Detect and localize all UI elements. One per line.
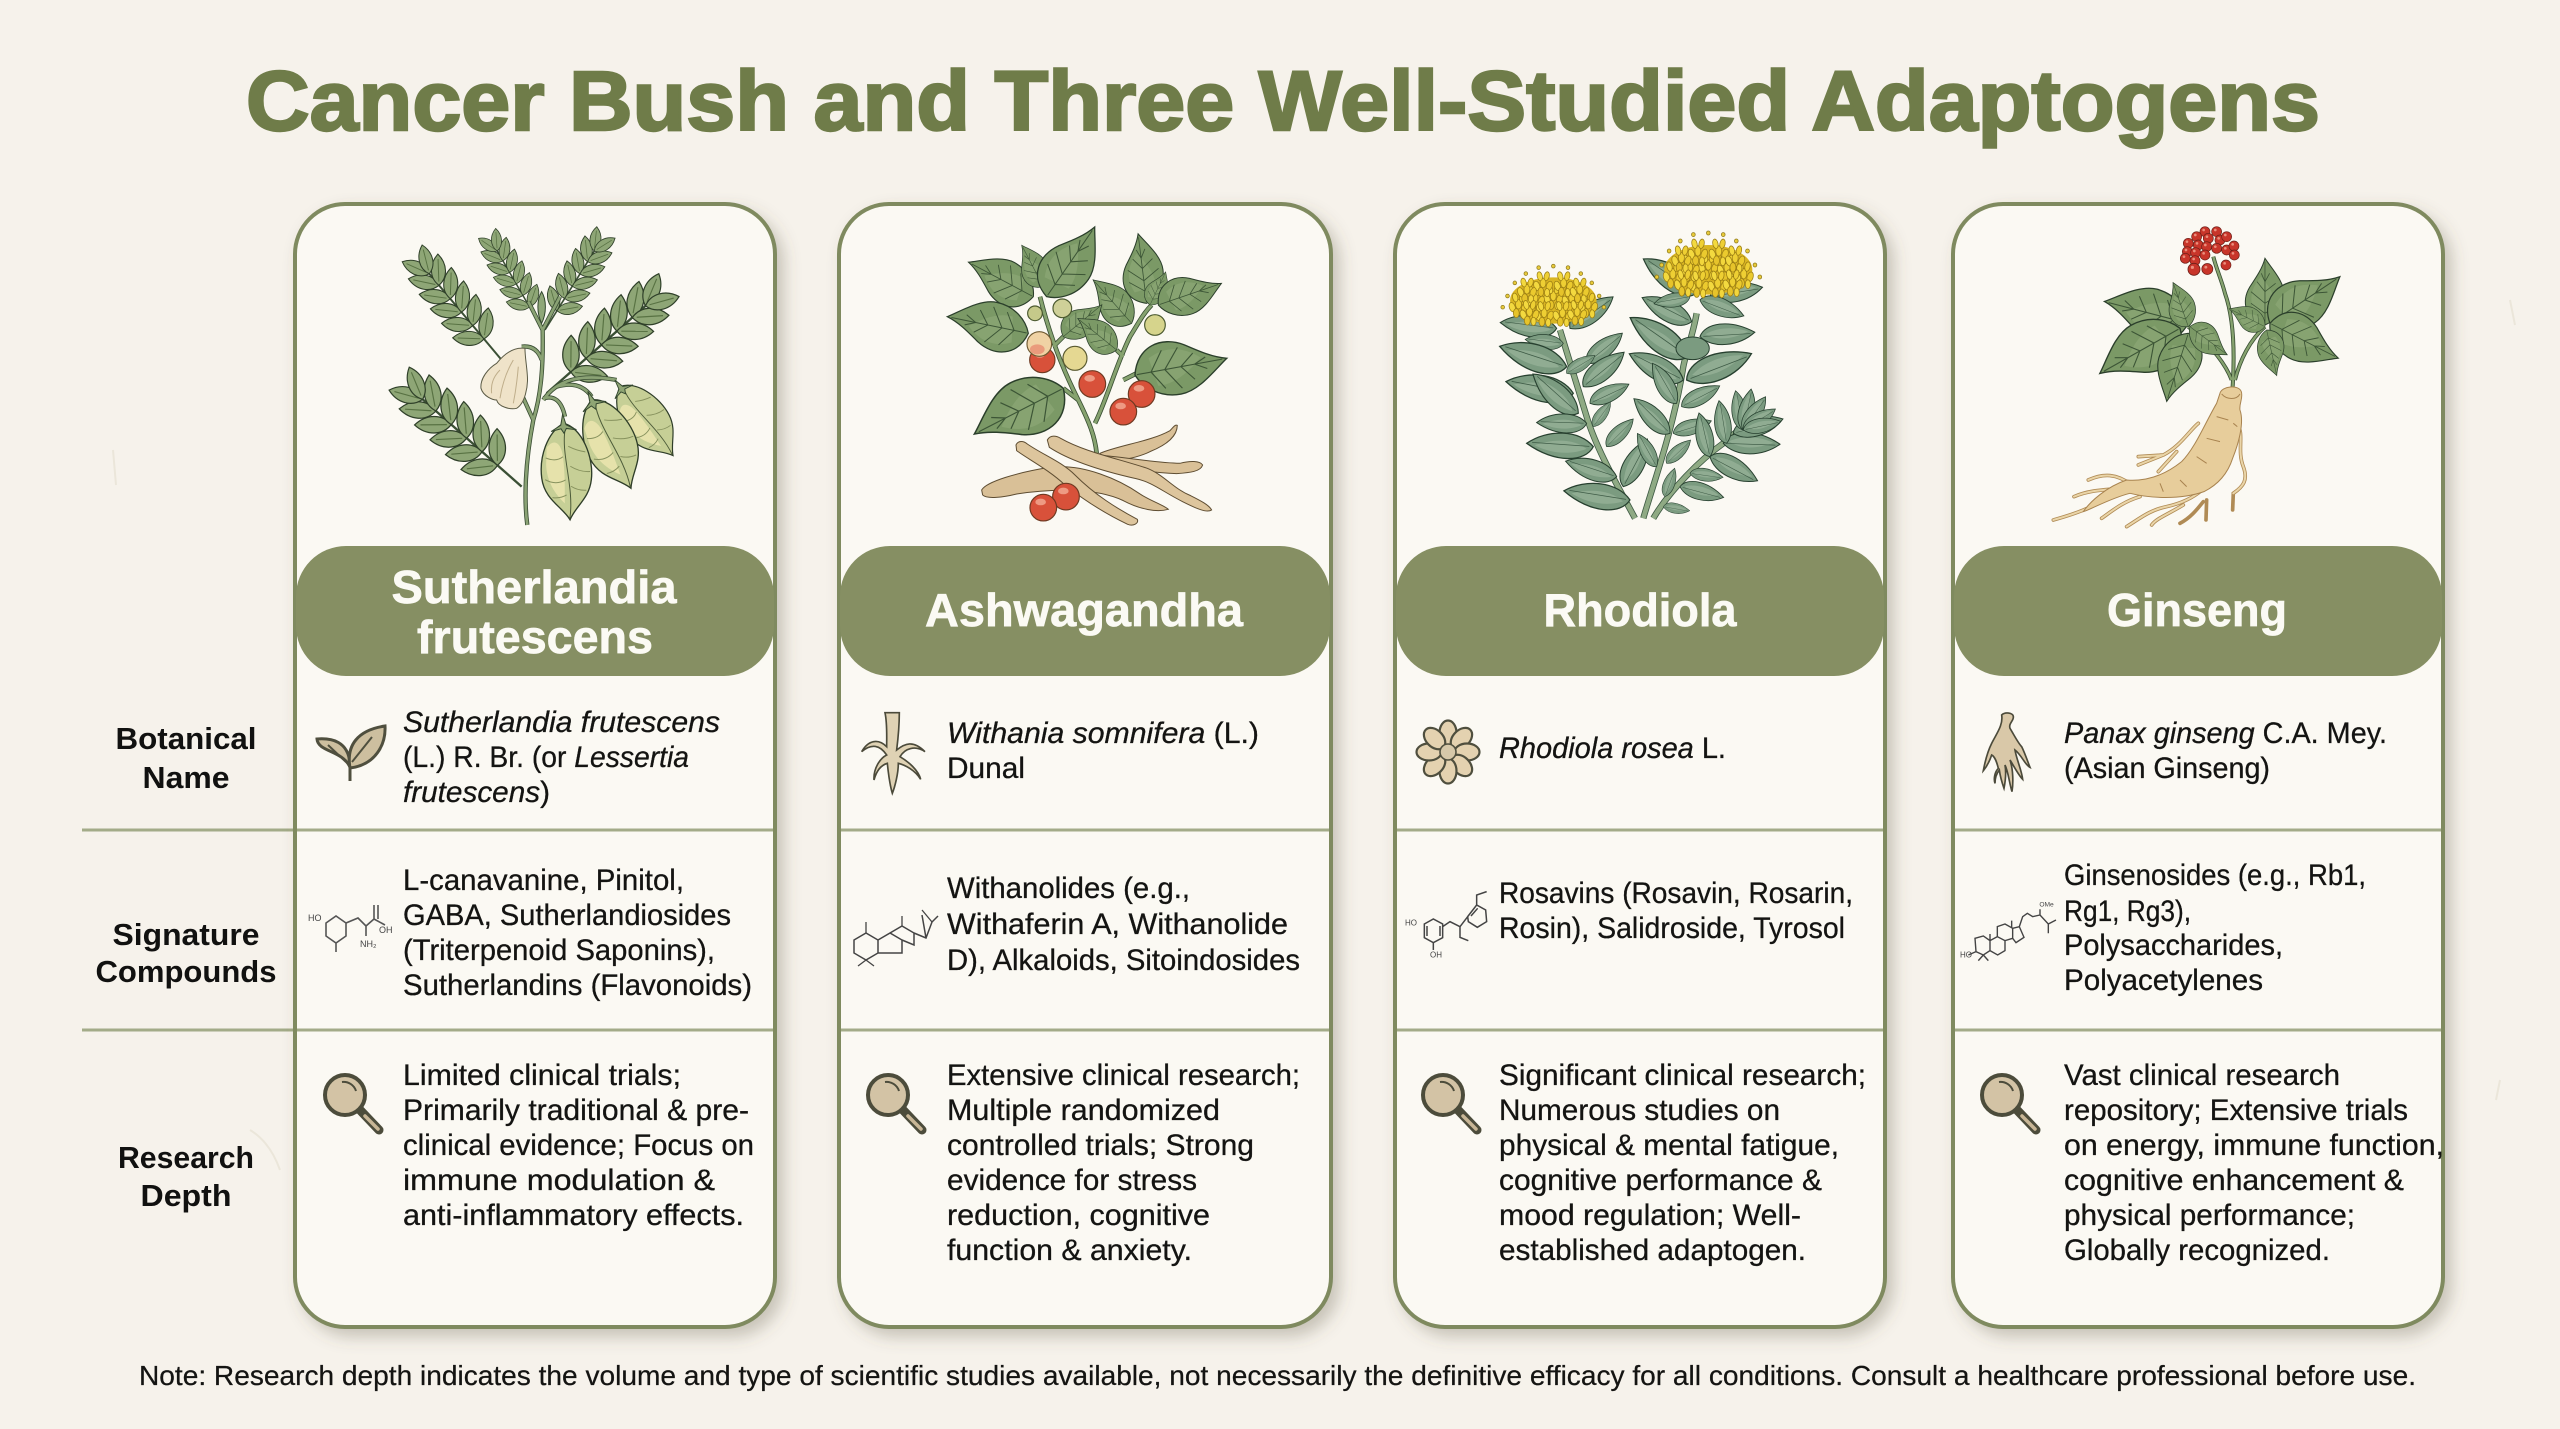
panel: Rhodiola [1395, 204, 1885, 1327]
icon: molecule: OH [379, 925, 392, 935]
text: research depth: Primarily traditional & pre- [403, 1094, 749, 1127]
plant illustration: Ashwagandha [942, 213, 1232, 525]
band: name heading: Ashwagandha [925, 584, 1243, 636]
text: research depth: clinical evidence; Focus on [403, 1129, 754, 1162]
icon: molecule [1960, 902, 2056, 961]
text: botanical name: Rhodiola rosea L. [1499, 732, 1726, 765]
band: name heading: Ginseng [2107, 584, 2287, 636]
text: botanical name: (Asian Ginseng) [2064, 752, 2270, 785]
text: botanical name: Dunal [947, 752, 1025, 785]
text: research depth: Vast clinical research [2064, 1059, 2340, 1092]
title: Cancer Bush and Three Well-Studied Adaptogens [246, 54, 2320, 148]
text: signature compounds [403, 864, 752, 1002]
text: signature compounds: GABA, Sutherlandiosides [403, 899, 731, 932]
band: name heading: Sutherlandia [392, 561, 677, 613]
text: research depth [2064, 1059, 2444, 1267]
text: research depth: anti-inflammatory effects. [403, 1199, 744, 1232]
footnote: Note: Research depth indicates the volume and type of scientific studies available, not necessarily the definitive efficacy for all conditions. Consult a healthcare professional before use. [139, 1360, 2416, 1391]
text: botanical name: Withania somnifera (L.) [947, 717, 1259, 750]
row label: signature compounds [96, 917, 276, 989]
text: signature compounds [947, 872, 1300, 977]
text: signature compounds: Rosin), Salidroside, Tyrosol [1499, 912, 1845, 945]
icon: magnifying glass [325, 1075, 379, 1130]
text: signature compounds: Polysaccharides, [2064, 929, 2283, 962]
plant illustration: Sutherlandia [375, 218, 693, 525]
text: botanical name: Panax ginseng C.A. Mey. [2064, 717, 2387, 750]
icon: magnifying glass [868, 1075, 922, 1130]
text: research depth: controlled trials; Strong [947, 1129, 1254, 1162]
text: research depth: repository; Extensive trials [2064, 1094, 2408, 1127]
text: signature compounds: Ginsenosides (e.g., Rb1, [2064, 859, 2366, 892]
icon: molecule [854, 910, 938, 966]
text: botanical name: Sutherlandia frutescens [403, 706, 720, 739]
text: research depth: Multiple randomized [947, 1094, 1220, 1127]
text: research depth: function & anxiety. [947, 1234, 1192, 1267]
icon: molecule: OMe [2039, 902, 2054, 909]
panel: Sutherlandia frutescens [295, 204, 775, 1327]
row label: signature compounds: Signature [112, 917, 260, 952]
row label: research depth: Depth [140, 1178, 232, 1213]
text: research depth: cognitive enhancement & [2064, 1164, 2404, 1197]
band: name heading [1954, 546, 2442, 676]
panel: Ginseng [1953, 204, 2444, 1327]
text: signature compounds: Polyacetylenes [2064, 964, 2263, 997]
icon: molecule [1405, 892, 1487, 960]
text: research depth: mood regulation; Well- [1499, 1199, 1801, 1232]
plant illustration: Rhodiola [1496, 231, 1785, 518]
text: research depth [403, 1059, 754, 1232]
text: signature compounds: Withaferin A, Withanolide [947, 908, 1288, 941]
icon: molecule: HO [1960, 950, 1972, 959]
icon: molecule: NH₂ [360, 939, 377, 949]
row label: research depth: Research [118, 1140, 254, 1175]
text: research depth [947, 1059, 1300, 1267]
icon: molecule: OH [1430, 951, 1442, 960]
icon: magnifying glass [1423, 1075, 1477, 1130]
text: research depth [1499, 1059, 1866, 1267]
text: signature compounds: Sutherlandins (Flavonoids) [403, 969, 752, 1002]
text: research depth: immune modulation & [403, 1164, 715, 1197]
row label: research depth [118, 1140, 254, 1213]
text: research depth: Limited clinical trials; [403, 1059, 681, 1092]
text: research depth: Extensive clinical research; [947, 1059, 1300, 1092]
icon: molecule: HO [1405, 919, 1417, 928]
row label: botanical name [116, 721, 256, 795]
text: research depth: physical & mental fatigue, [1499, 1129, 1839, 1162]
text: botanical name [403, 706, 720, 809]
text: research depth: physical performance; [2064, 1199, 2355, 1232]
icon: leaf [317, 726, 385, 781]
text: research depth: evidence for stress [947, 1164, 1197, 1197]
text: research depth: Significant clinical research; [1499, 1059, 1866, 1092]
band: name heading [1396, 546, 1884, 676]
text: research depth: established adaptogen. [1499, 1234, 1806, 1267]
band: name heading [296, 546, 774, 676]
band: name heading [840, 546, 1330, 676]
text: research depth: Numerous studies on [1499, 1094, 1780, 1127]
row label: botanical name: Botanical [116, 721, 256, 756]
text: signature compounds: (Triterpenoid Saponins), [403, 934, 715, 967]
icon: root [862, 713, 925, 793]
text: signature compounds [1499, 877, 1853, 945]
text: research depth: cognitive performance & [1499, 1164, 1822, 1197]
text: signature compounds [2064, 859, 2366, 997]
text: botanical name: frutescens) [403, 776, 550, 809]
icon: molecule [308, 905, 392, 952]
row label: botanical name: Name [142, 760, 230, 795]
band: name heading: frutescens [417, 611, 653, 663]
icon: molecule: HO [308, 913, 322, 923]
text: botanical name [947, 717, 1259, 785]
text: botanical name: (L.) R. Br. (or Lessertia [403, 741, 689, 774]
text: botanical name [2064, 717, 2387, 785]
icon: flower [1416, 720, 1480, 784]
icon: magnifying glass [1982, 1075, 2036, 1130]
text: research depth: reduction, cognitive [947, 1199, 1210, 1232]
row label: signature compounds: Compounds [96, 954, 276, 989]
text: signature compounds: D), Alkaloids, Sitoindosides [947, 944, 1300, 977]
plant illustration: Ginseng [2053, 227, 2353, 527]
text: signature compounds: Withanolides (e.g., [947, 872, 1190, 905]
row labels [96, 721, 276, 1213]
left row divider lines [82, 830, 293, 1030]
icon: ginseng root [1983, 713, 2030, 792]
panel: Ashwagandha [839, 204, 1331, 1327]
text: signature compounds: Rg1, Rg3), [2064, 895, 2191, 928]
text: research depth: Globally recognized. [2064, 1234, 2330, 1267]
text: signature compounds: L-canavanine, Pinitol, [403, 864, 684, 897]
text: research depth: on energy, immune function, [2064, 1129, 2444, 1162]
text: signature compounds: Rosavins (Rosavin, Rosarin, [1499, 877, 1853, 910]
band: name heading: Rhodiola [1544, 584, 1737, 636]
